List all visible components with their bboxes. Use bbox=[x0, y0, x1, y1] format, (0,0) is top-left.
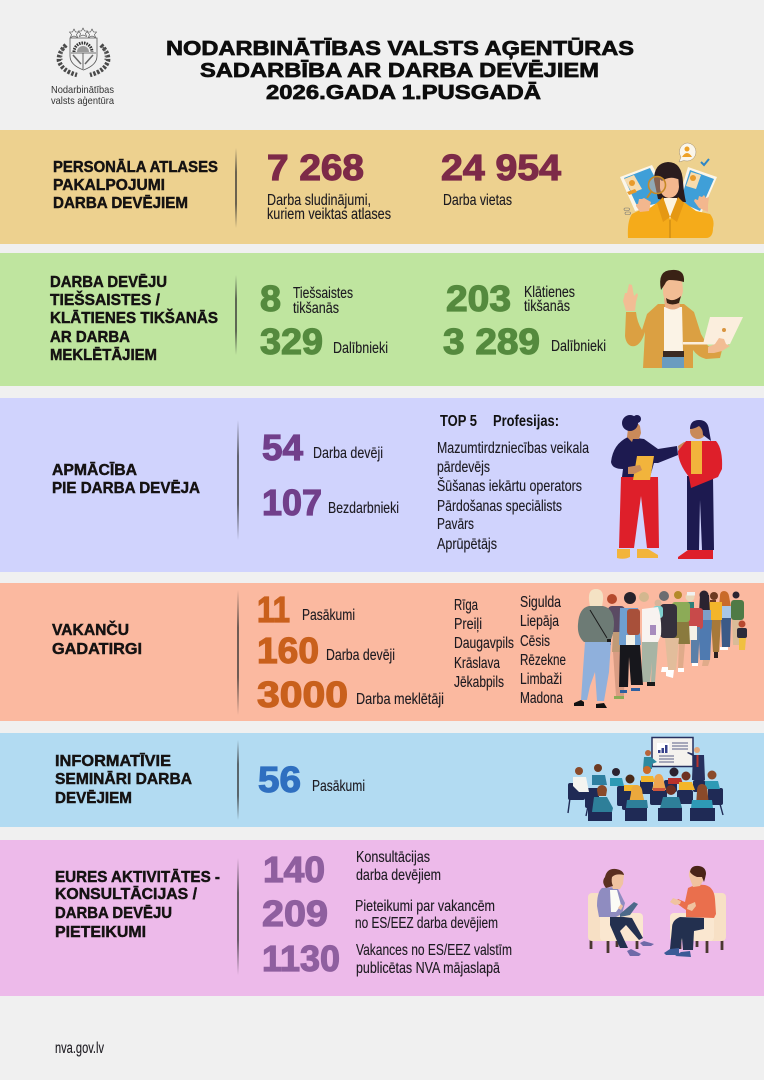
heading: PERSONĀLA ATLASES bbox=[53, 159, 218, 176]
logo text: Nodarbinātības bbox=[51, 84, 114, 96]
stat: 56 pasākumi: 56 bbox=[258, 759, 301, 800]
icon: coat of arms bbox=[59, 28, 108, 75]
stat: 160 darba devēji bbox=[257, 630, 395, 671]
city list column 1: Krāslava bbox=[454, 655, 500, 672]
stat: 140 konsultācijas: darba devējiem bbox=[356, 867, 441, 884]
stat: 11 pasākumi: 11 bbox=[257, 589, 290, 630]
stat: 8 tiešsaistes tikšanās bbox=[260, 278, 353, 319]
stat: 24 954 bbox=[441, 147, 561, 209]
panel: apmācība pie darba devēja bbox=[0, 398, 764, 572]
stat: 54 darba devēji: Darba devēji bbox=[313, 445, 383, 462]
stat: 107 bezdarbnieki: 107 bbox=[262, 482, 322, 523]
heading: SEMINĀRI DARBA bbox=[55, 771, 192, 788]
heading bbox=[50, 274, 218, 364]
city list column 2: Liepāja bbox=[520, 613, 559, 630]
stat: 140 konsultācijas: Konsultācijas bbox=[356, 849, 430, 866]
logo text: valsts aģentūra bbox=[51, 94, 114, 107]
city list column 2: Sigulda bbox=[520, 594, 561, 611]
stat: 3 289 dalībnieki bbox=[443, 321, 606, 362]
illustration: queue of people bbox=[574, 589, 747, 708]
stat: 1130 vakances: Vakances no ES/EEZ valstīm bbox=[356, 942, 512, 959]
top 5 professions list: Pārdošanas speciālists bbox=[437, 498, 562, 515]
stat: 3000 darba meklētāji: Darba meklētāji bbox=[356, 691, 444, 708]
stat: 54 darba devēji bbox=[262, 427, 383, 468]
stat: 140 konsultācijas bbox=[263, 849, 441, 890]
stat: 7 268: Darba sludinājumi, bbox=[267, 192, 371, 209]
heading: APMĀCĪBA bbox=[52, 462, 137, 479]
stat: 203 klātienes tikšanās: Klātienes bbox=[524, 284, 575, 301]
stat: 8 tiešsaistes tikšanās: 8 bbox=[260, 278, 281, 319]
heading bbox=[53, 159, 218, 212]
city list column 2 bbox=[520, 594, 566, 707]
top 5 professions list: Pavārs bbox=[437, 516, 474, 533]
panel: informatīvie semināri bbox=[0, 733, 764, 827]
logo bbox=[51, 28, 114, 107]
stat: 107 bezdarbnieki bbox=[262, 482, 399, 523]
stat: 3 289 dalībnieki: 3 289 bbox=[443, 321, 540, 362]
stat: 1130 vakances: publicētas NVA mājaslapā bbox=[356, 960, 500, 977]
panel background bbox=[0, 253, 764, 386]
heading: PIETEIKUMI bbox=[55, 924, 146, 941]
city list column 1: Rīga bbox=[454, 597, 478, 614]
stat: 140 konsultācijas: 140 bbox=[263, 849, 325, 890]
heading bbox=[52, 621, 142, 658]
stat: 8 tiešsaistes tikšanās: Tiešsaistes bbox=[293, 285, 353, 302]
stat: 209 pieteikumi: Pieteikumi par vakancēm bbox=[355, 898, 495, 915]
top 5 professions list: Mazumtirdzniecības veikala bbox=[437, 440, 589, 457]
city list column 2: Cēsis bbox=[520, 633, 550, 650]
heading: PAKALPOJUMI bbox=[53, 177, 165, 194]
top 5 professions list: Šūšanas iekārtu operators bbox=[437, 476, 582, 495]
panel background bbox=[0, 130, 764, 244]
title: SADARBĪBA AR DARBA DEVĒJIEM bbox=[200, 60, 599, 82]
stat: 160 darba devēji: 160 bbox=[257, 630, 319, 671]
panel: vakanču gadatirgi bbox=[0, 583, 764, 721]
stat: 7 268: kuriem veiktas atlases bbox=[267, 206, 391, 223]
stat: 329 dalībnieki: 329 bbox=[260, 321, 323, 362]
stat: 107 bezdarbnieki: Bezdarbnieki bbox=[328, 500, 399, 517]
illustration: two colleagues talking bbox=[611, 415, 722, 559]
heading: MEKLĒTĀJIEM bbox=[50, 347, 157, 364]
stat: 56 pasākumi bbox=[258, 759, 365, 800]
stat: 1130 vakances bbox=[262, 938, 512, 979]
stat: 203 klātienes tikšanās bbox=[446, 278, 575, 319]
stat: 209 pieteikumi: no ES/EEZ darba devējiem bbox=[355, 915, 498, 932]
panel: eures aktivitātes bbox=[0, 840, 764, 996]
city list column 1: Jēkabpils bbox=[454, 674, 504, 691]
panel: tikšanās ar darba meklētājiem bbox=[0, 253, 764, 386]
stat: 11 pasākumi: Pasākumi bbox=[302, 607, 355, 624]
top 5 professions list: Aprūpētājs bbox=[437, 536, 497, 553]
stat: 8 tiešsaistes tikšanās: tikšanās bbox=[293, 300, 339, 317]
heading: INFORMATĪVIE bbox=[55, 753, 171, 770]
illustration: seminar audience bbox=[568, 738, 723, 821]
stat: 329 dalībnieki: Dalībnieki bbox=[333, 340, 388, 357]
illustration: man with laptop bbox=[623, 270, 743, 368]
city list column 1: Preiļi bbox=[454, 616, 482, 633]
stat: 203 klātienes tikšanās: tikšanās bbox=[524, 298, 570, 315]
heading: PIE DARBA DEVĒJA bbox=[52, 480, 200, 497]
footer url: nva.gov.lv bbox=[55, 1040, 104, 1057]
panel background bbox=[0, 398, 764, 572]
heading: DARBA DEVĒJU bbox=[50, 274, 167, 291]
stat: 11 pasākumi bbox=[257, 589, 355, 630]
panel background bbox=[0, 733, 764, 827]
title: 2026.GADA 1.PUSGADĀ bbox=[266, 82, 541, 104]
top 5 professions list: Profesijas: bbox=[493, 413, 559, 430]
stat: 160 darba devēji: Darba devēji bbox=[326, 647, 395, 664]
stat: 3000 darba meklētāji: 3000 bbox=[257, 674, 348, 715]
stat: 1130 vakances: 1130 bbox=[262, 938, 340, 979]
title bbox=[166, 38, 634, 104]
panel background bbox=[0, 583, 764, 721]
city list column 1 bbox=[454, 597, 514, 691]
heading: KONSULTĀCIJAS / bbox=[55, 886, 198, 903]
heading: GADATIRGI bbox=[52, 641, 142, 658]
heading bbox=[55, 753, 192, 807]
stat: 24 954: Darba vietas bbox=[443, 192, 512, 209]
stat: 7 268 bbox=[267, 147, 391, 223]
stat: 7 268: 7 268 bbox=[267, 147, 364, 188]
city list column 2: Rēzekne bbox=[520, 652, 566, 669]
stat: 56 pasākumi: Pasākumi bbox=[312, 778, 365, 795]
city list column 2: Madona bbox=[520, 690, 563, 707]
stat: 203 klātienes tikšanās: 203 bbox=[446, 278, 511, 319]
heading bbox=[52, 462, 200, 497]
top 5 professions list: pārdevējs bbox=[437, 459, 490, 476]
stat: 24 954: 24 954 bbox=[441, 147, 561, 188]
stat: 54 darba devēji: 54 bbox=[262, 427, 303, 468]
top 5 professions list bbox=[437, 413, 589, 553]
heading: DARBA DEVĒJIEM bbox=[53, 195, 188, 212]
heading bbox=[55, 869, 220, 941]
heading: AR DARBA bbox=[50, 329, 130, 346]
stat: 209 pieteikumi: 209 bbox=[262, 893, 328, 934]
illustration: consultation bbox=[588, 866, 726, 957]
panel background bbox=[0, 840, 764, 996]
title: NODARBINĀTĪBAS VALSTS AĢENTŪRAS bbox=[166, 38, 634, 60]
stat: 3000 darba meklētāji bbox=[257, 674, 444, 715]
top 5 professions list: TOP 5 bbox=[440, 413, 477, 430]
heading: DEVĒJIEM bbox=[55, 790, 132, 807]
stat: 3 289 dalībnieki: Dalībnieki bbox=[551, 338, 606, 355]
heading: DARBA DEVĒJU bbox=[55, 905, 172, 922]
heading: VAKANČU bbox=[52, 621, 129, 639]
heading: KLĀTIENES TIKŠANĀS bbox=[50, 309, 218, 327]
city list column 1: Daugavpils bbox=[454, 635, 514, 652]
heading: TIEŠSAISTES / bbox=[50, 291, 161, 309]
heading: EURES AKTIVITĀTES - bbox=[55, 869, 220, 886]
stat: 329 dalībnieki bbox=[260, 321, 388, 362]
illustration: recruiter with magnifier bbox=[620, 143, 717, 238]
logo text bbox=[51, 84, 114, 107]
panel: personāla atlases pakalpojumi bbox=[0, 130, 764, 244]
stat: 209 pieteikumi bbox=[262, 893, 498, 934]
city list column 2: Limbaži bbox=[520, 671, 562, 688]
